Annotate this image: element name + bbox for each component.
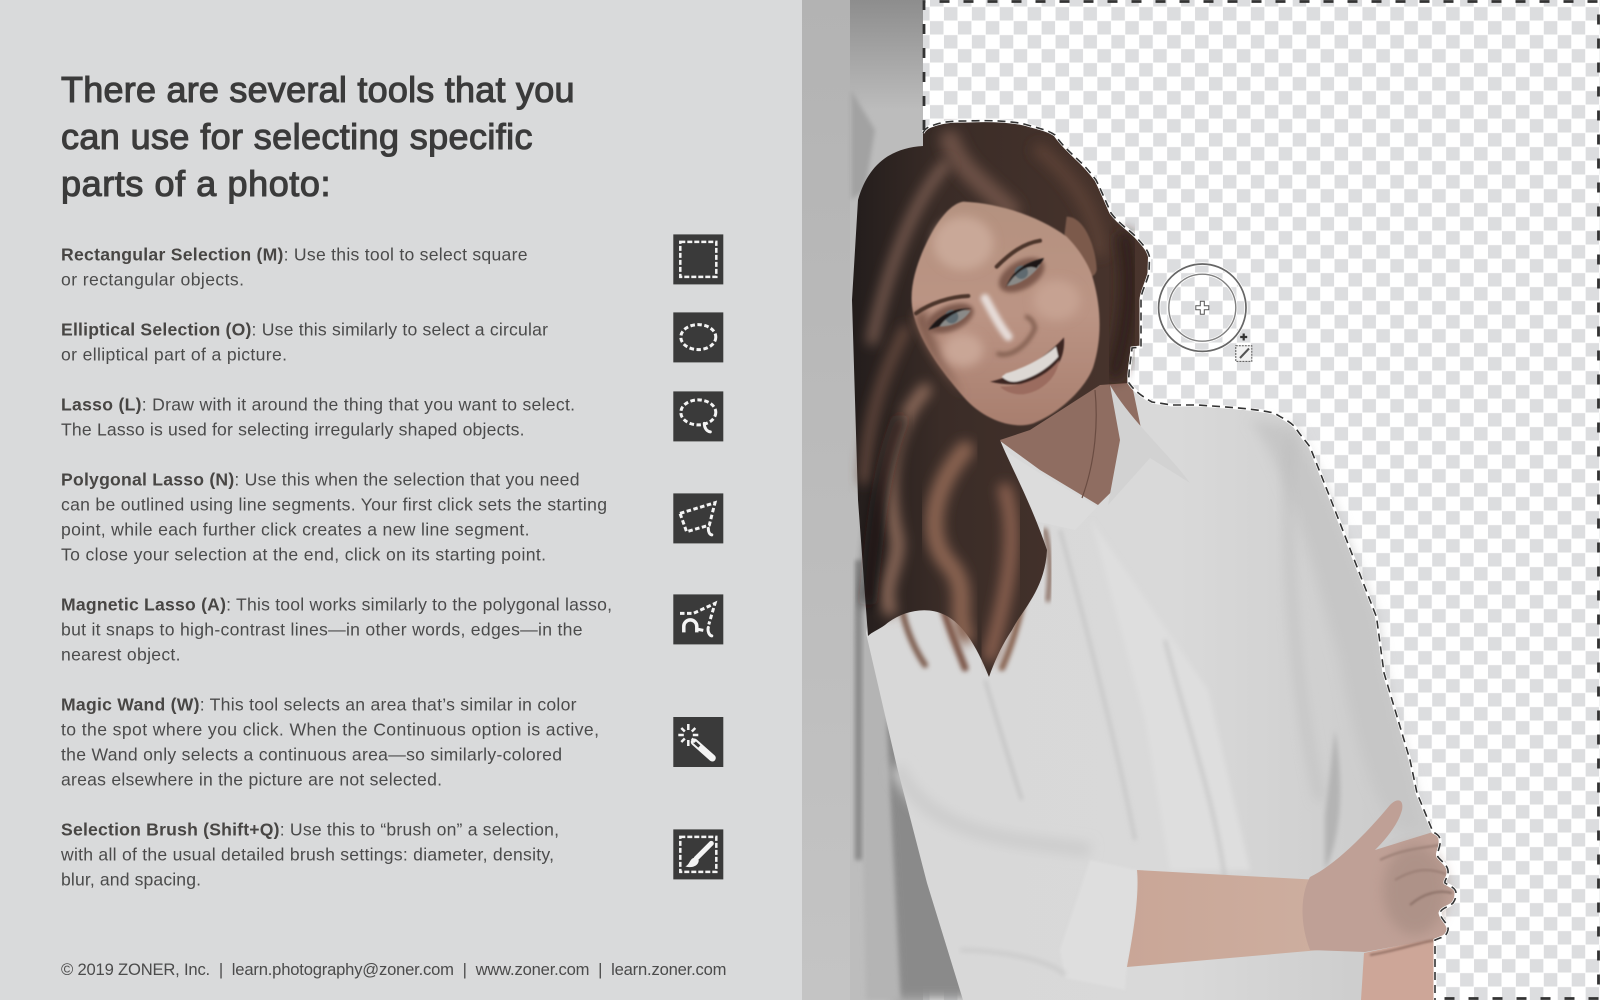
cursor crosshair bbox=[1196, 301, 1209, 314]
text: selection brush: Selection Brush (Shift+Q): Use this to “brush on” a selection, bbox=[61, 820, 559, 840]
text: magic wand: the Wand only selects a continuous area—so similarly-colored bbox=[61, 745, 562, 765]
text: lasso: The Lasso is used for selecting irregularly shaped objects. bbox=[61, 420, 524, 440]
text: magic wand: to the spot where you click. When the Continuous option is active, bbox=[61, 720, 599, 740]
mini brush badge bbox=[1236, 346, 1252, 361]
shirt collar bbox=[990, 385, 1190, 530]
feathered hair ends bbox=[900, 530, 1050, 668]
text: rectangular selection bbox=[61, 245, 528, 290]
text: elliptical selection bbox=[61, 320, 548, 365]
wall shadow beside the body bbox=[855, 560, 1000, 1000]
photo: woman leaning on the wall bbox=[852, 121, 1456, 1000]
text: selection brush: blur, and spacing. bbox=[61, 870, 201, 890]
panel: text background bbox=[0, 0, 803, 1000]
text: magnetic lasso bbox=[61, 595, 612, 665]
text: lasso bbox=[61, 395, 575, 440]
text: magic wand bbox=[61, 695, 599, 790]
skin bbox=[912, 202, 1100, 425]
text: magnetic lasso: but it snaps to high-contrast lines—in other words, edges—in the bbox=[61, 620, 582, 640]
hair mass bbox=[852, 121, 1150, 677]
sleeve cuff bbox=[960, 860, 1138, 990]
transparency checkerboard bbox=[923, 0, 1600, 1000]
text: elliptical selection: Elliptical Selection (O): Use this similarly to select a circular bbox=[61, 320, 548, 340]
hand bbox=[1302, 800, 1456, 955]
text: selection brush: with all of the usual detailed brush settings: diameter, density, bbox=[60, 845, 554, 865]
brush cursor bbox=[1159, 264, 1252, 361]
mouth bbox=[990, 337, 1064, 394]
cursor rings bbox=[1159, 264, 1246, 351]
lower arm bbox=[1361, 938, 1435, 1000]
icon: magic wand bbox=[673, 717, 723, 767]
text: rectangular selection: or rectangular objects. bbox=[61, 270, 244, 290]
heading: There are several tools that you bbox=[61, 69, 574, 110]
heading: can use for selecting specific bbox=[61, 116, 532, 157]
icon: rectangular selection bbox=[673, 234, 723, 284]
text: magnetic lasso: Magnetic Lasso (A): This tool works similarly to the polygonal lasso, bbox=[61, 595, 612, 615]
text: polygonal lasso: can be outlined using line segments. Your first click sets the starting bbox=[61, 495, 607, 515]
icon: elliptical selection bbox=[673, 312, 723, 362]
face bbox=[912, 202, 1100, 425]
text: rectangular selection: Rectangular Selection (M): Use this tool to select square bbox=[61, 245, 528, 265]
text: elliptical selection: or elliptical part of a picture. bbox=[61, 345, 287, 365]
forearm bbox=[1127, 870, 1320, 967]
text: magnetic lasso: nearest object. bbox=[61, 645, 180, 665]
ear bbox=[1063, 217, 1097, 276]
icon: lasso bbox=[673, 391, 723, 441]
hair highlights bbox=[864, 140, 1129, 655]
footer: © 2019 ZONER, Inc. | learn.photography@zoner.com | www.zoner.com | learn.zoner.com bbox=[61, 960, 726, 979]
face shading bbox=[913, 310, 963, 397]
eyebrows bbox=[997, 241, 1040, 267]
shirt bbox=[866, 383, 1433, 1000]
heading bbox=[61, 69, 574, 204]
add-mode plus bbox=[1240, 334, 1247, 340]
background: concrete wall bbox=[802, 0, 924, 1000]
heading: parts of a photo: bbox=[61, 163, 330, 204]
text: selection brush bbox=[60, 820, 559, 890]
icon: polygonal lasso bbox=[673, 493, 723, 543]
nose bbox=[985, 298, 1008, 337]
neck and chest bbox=[985, 370, 1147, 505]
text: magic wand: Magic Wand (W): This tool selects an area that’s similar in color bbox=[61, 695, 577, 715]
icon: magnetic lasso bbox=[673, 594, 723, 644]
text: polygonal lasso: To close your selection at the end, click on its starting point. bbox=[61, 545, 546, 565]
text: polygonal lasso bbox=[61, 470, 607, 565]
text: magic wand: areas elsewhere in the picture are not selected. bbox=[61, 770, 442, 790]
eyes bbox=[928, 258, 1044, 330]
icon: selection brush bbox=[673, 829, 723, 879]
text: polygonal lasso: Polygonal Lasso (N): Use this when the selection that you need bbox=[61, 470, 580, 490]
text: lasso: Lasso (L): Draw with it around the thing that you want to select. bbox=[61, 395, 575, 415]
text: polygonal lasso: point, while each further click creates a new line segment. bbox=[61, 520, 530, 540]
selection outline around photo bbox=[923, 2, 1598, 1000]
